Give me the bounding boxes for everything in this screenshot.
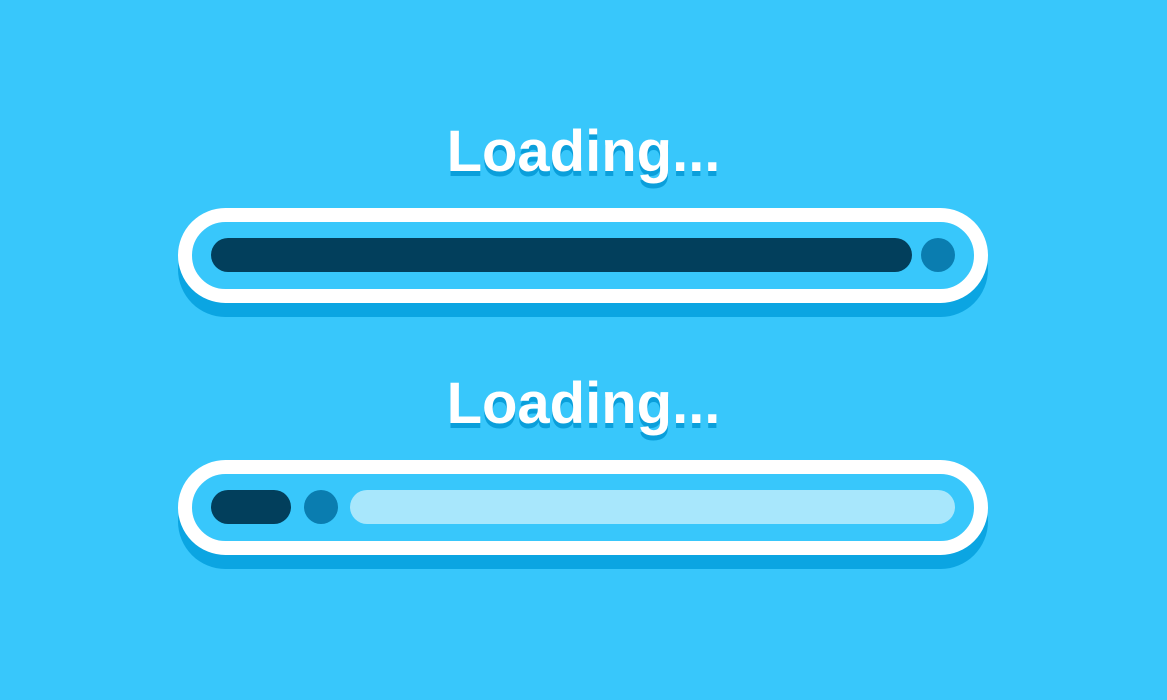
title: top loading: Loading... bbox=[447, 119, 720, 184]
progress dot bbox=[304, 490, 338, 524]
progress dot bbox=[921, 238, 955, 272]
filled progress bbox=[211, 238, 912, 272]
filled progress bbox=[211, 490, 291, 524]
remaining track bbox=[350, 490, 955, 524]
progress bar: starting bbox=[178, 460, 988, 569]
title: bottom loading: Loading... bbox=[447, 371, 720, 436]
progress bar: nearly full bbox=[178, 208, 988, 317]
